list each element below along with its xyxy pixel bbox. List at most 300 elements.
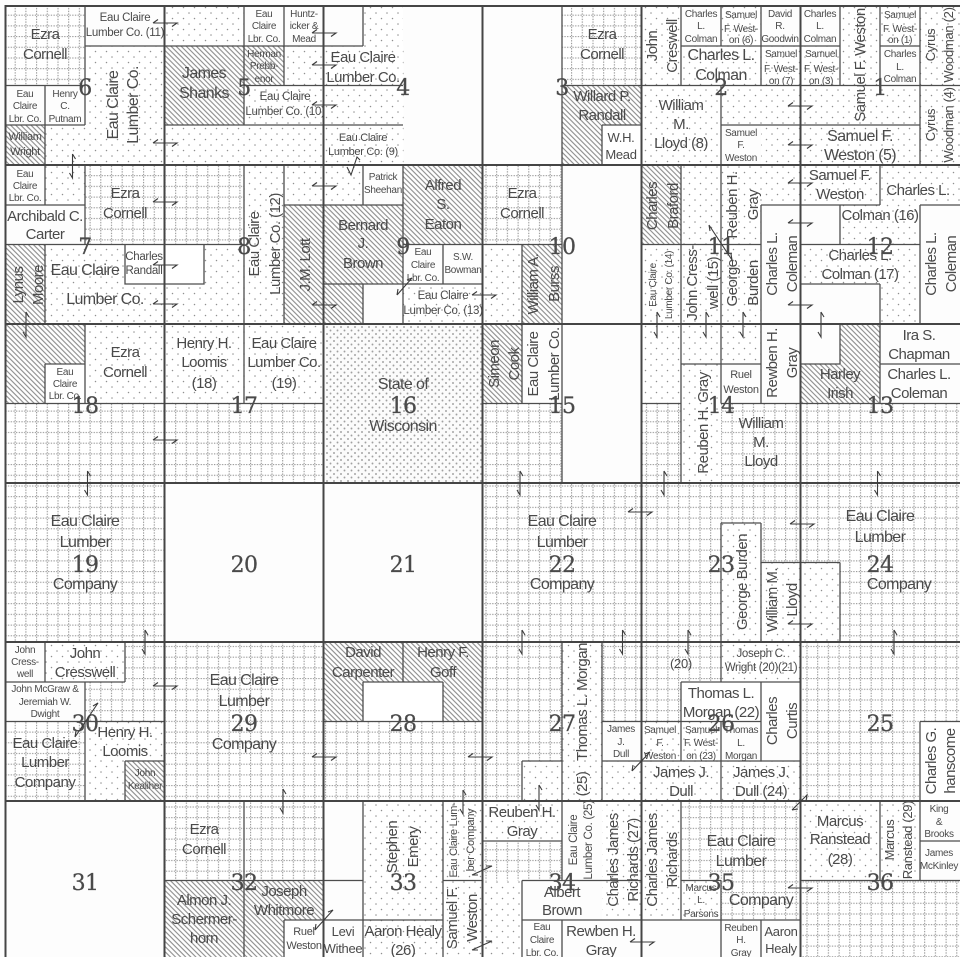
owner: W.H. Mead: W.H. [608, 130, 634, 145]
owner: King & Brooks: King [930, 804, 948, 815]
owner: William Wright: William [8, 131, 42, 143]
owner: Eau Claire Lumber Co. (9): Lumber Co. (9) [328, 146, 398, 158]
owner: Samuel F. Weston, section 2: F. [737, 140, 745, 151]
owner: Eau Claire Lumber Company, section 19: Company [53, 576, 118, 593]
section number 5: 5 [237, 76, 251, 101]
owner: James J. Dull, small parcel: Dull [613, 749, 629, 760]
owner: Ezra Cornell, section 32: Cornell [182, 841, 226, 858]
owner: Eau Claire Lumber Company, section 35: Company [729, 892, 794, 909]
owner: Eau Claire Lumber Co., section 6: Lumber Co. [125, 66, 142, 144]
owner: Eau Claire Lumber Company, section 35: Lumber [716, 853, 768, 870]
section number 19: 19 [72, 553, 98, 578]
owner: S.W. Bowman: Bowman [444, 265, 482, 276]
owner: Thomas L. Morgan (25): (25) [574, 771, 591, 796]
owner: Charles L. Colman, section 1: Colman [884, 74, 916, 85]
owner: Levi Withee: Withee [324, 941, 362, 956]
section number 11: 11 [708, 235, 734, 260]
owner: Eau Claire Lumber Company, section 29: Eau Claire [210, 672, 279, 689]
owner: Stephen Emery: Stephen [384, 821, 401, 873]
owner: Joseph Whitmore: Whitmore [254, 902, 314, 919]
owner: Charles James Richards: Charles James [644, 813, 661, 907]
owner: Samuel F. Weston (6): F. West- [724, 24, 758, 35]
owner: Samuel F. Weston (1): on (1) [888, 35, 912, 46]
owner: Almon J. Schermerhorn: horn [190, 930, 218, 947]
owner: Levi Withee: Levi [332, 924, 355, 939]
owner: Eau Claire Lbr. Co., section 6: Lbr. Co. [9, 114, 41, 125]
section number 9: 9 [396, 235, 410, 260]
owner: Samuel F. Weston, section 12: Weston [816, 186, 864, 203]
owner: Bernard J. Brown: Bernard [338, 217, 388, 234]
section number 25: 25 [867, 712, 893, 737]
owner: Eau Claire Lumber Co., section 15: Lumber Co. [546, 327, 563, 401]
section number 36: 36 [867, 871, 893, 896]
owner: Herman Prebbenor: Herman [247, 49, 281, 60]
section number 10: 10 [549, 235, 575, 260]
owner: State of Wisconsin: State of [378, 376, 429, 393]
section number 4: 4 [396, 76, 410, 101]
owner: Cyrus Woodman (4): Woodman (4) [941, 87, 956, 163]
owner: Eau Claire Lbr. Co., section 6: Claire [13, 101, 38, 112]
section number 29: 29 [231, 712, 257, 737]
owner: Samuel F. Weston (5): Samuel F. [827, 128, 893, 145]
owner: Eau Claire Lumber Co. (19): Eau Claire [251, 335, 317, 352]
owner: Henry H. Loomis, section 30: Loomis [102, 743, 148, 760]
owner: Eau Claire Lumber Company, section 24: Company [867, 576, 932, 593]
owner: Eau Claire Lumber Company, section 30: Lumber [21, 754, 69, 771]
owner: Thomas L. Morgan, small parcel: Thomas [724, 725, 758, 736]
owner: Ezra Cornell, section 7-8: Cornell [103, 205, 147, 222]
owner: Samuel F. Weston (23): Samuel [685, 725, 717, 736]
owner: William M. Lloyd (8): William [659, 97, 703, 114]
section number 8: 8 [237, 235, 251, 260]
owner: David Carpenter: David [345, 644, 381, 661]
owner: Reuben H. Gray, small parcel: Reuben [724, 923, 758, 934]
section number 20: 20 [231, 553, 257, 578]
owner: Eau Claire Lumber Company, section 24: Lumber [855, 529, 907, 546]
owner: Henry F. Goff: Henry F. [417, 644, 469, 661]
owner: Eau Claire Lbr. Co., section 9: Eau [415, 247, 431, 258]
owner: Charles Randall: Randall [126, 265, 162, 277]
owner: S.W. Bowman: S.W. [453, 252, 473, 263]
parcel note: (20): (20) [670, 656, 692, 671]
owner: Ruel Weston, section 14: Ruel [730, 369, 752, 381]
owner: Eau Claire Lbr. Co., section 5: Eau [256, 9, 272, 20]
owner: Ezra Cornell, section 18: Cornell [103, 364, 147, 381]
owner: Charles Curtis: Charles [764, 697, 781, 745]
owner: Eau Claire Lbr. Co., section 18: Lbr. Co. [49, 391, 81, 402]
owner: Henry H. Loomis (18): (18) [192, 375, 217, 392]
owner: Samuel F. Weston (1): Samuel [884, 10, 916, 21]
owner: Samuel F. Weston, section 33: Samuel F. [444, 887, 461, 949]
owner: Bernard J. Brown: J. [358, 235, 368, 252]
owner: Patrick Sheehan: Patrick [369, 172, 399, 183]
owner: Marcus Ranstead (29): Ranstead (29) [900, 801, 915, 879]
owner: Charles L. Coleman, section 12: Coleman [943, 236, 960, 292]
owner: Samuel F. Weston (3): Samuel [805, 49, 837, 60]
owner: Eau Claire Lumber Company, section 29: Company [212, 736, 277, 753]
owner: Eau Claire Lbr. Co., section 18: Eau [57, 367, 73, 378]
owner: Ezra Cornell, section 18: Ezra [111, 344, 141, 361]
section number 16: 16 [390, 394, 416, 419]
owner: Alfred S. Eaton: Alfred [425, 177, 461, 194]
owner: Eau Claire Lumber Company, section 22: Lumber [537, 534, 589, 551]
owner: Charles L. Colman (16): Colman (16) [841, 207, 919, 224]
owner: Thomas L. Morgan, small parcel: Morgan [725, 751, 757, 762]
owner: Alfred S. Eaton: S. [436, 196, 450, 213]
owner: Charles L. Colman (17): Colman (17) [821, 266, 899, 283]
owner: Henry H. Loomis (18): Henry H. [176, 335, 232, 352]
owner: Eau Claire Lumber Co. (25): Eau Claire [568, 815, 580, 865]
owner: John McGraw & Jeremiah W. Dwight: Dwight [31, 709, 60, 720]
owner: Patrick Sheehan: Sheehan [364, 185, 402, 196]
owner: John Creswell: John [644, 31, 661, 61]
owner: Joseph C. Wright (20)(21): Wright (20)(21) [725, 662, 798, 674]
owner: Eau Claire Lbr. Co., section 9: Claire [411, 260, 436, 271]
owner: King & Brooks: Brooks [924, 829, 954, 840]
owner: Ezra Cornell, section 6: Cornell [23, 46, 67, 63]
owner: James McKinley: McKinley [920, 861, 958, 872]
owner: David R. Goodwin: David [768, 9, 792, 20]
section number 21: 21 [390, 553, 416, 578]
owner: David Carpenter: Carpenter [332, 664, 395, 681]
owner: Samuel F. Weston (7): F. West- [764, 64, 798, 75]
owner: George Burden, section 23: George Burden [734, 534, 751, 630]
owner: Eau Claire Lumber Company, section 22: Eau Claire [528, 513, 597, 530]
owner: Samuel F. Weston, vertical: Samuel F. Weston [852, 8, 869, 122]
owner: Archibald C. Carter: Carter [26, 226, 65, 243]
owner: Marcus Ranstead (28): Ranstead [810, 831, 870, 848]
owner: Eau Claire Lumber Co. (11): Eau Claire [100, 12, 150, 24]
owner: Huntzicker & Mead: Huntz- [290, 9, 318, 20]
owner: Henry C. Putnam: C. [60, 101, 70, 112]
owner: John Cresswell, section 30: John [70, 645, 100, 662]
owner: Aaron Healy, section 35: Healy [765, 941, 798, 956]
section number 14: 14 [708, 394, 734, 419]
owner: Eau Claire Lbr. Co., section 5: Lbr. Co. [248, 34, 280, 45]
owner: Charles L. Colman (16): Charles L. [886, 182, 950, 199]
owner: Reuben H. Gray, section 11: Reuben H. [724, 171, 741, 239]
owner: Samuel F. Weston, section 2: Weston [725, 153, 757, 164]
section number 31: 31 [72, 871, 98, 896]
owner: Reuben H. Gray, small parcel: H. [736, 935, 746, 946]
owner: Joseph C. Wright (20)(21): Joseph C. [736, 648, 786, 660]
owner: Cyrus Woodman (2): Cyrus [923, 28, 938, 61]
owner: Ezra Cornell, section 7-8: Ezra [111, 185, 141, 202]
owner: James McKinley: James [925, 848, 953, 859]
section number 1: 1 [873, 76, 887, 101]
owner: Samuel F. Weston, section 12: Samuel F. [809, 167, 871, 184]
owner: James J. Dull, small parcel: J. [617, 737, 625, 748]
owner: Herman Prebbenor: Prebb- [250, 61, 278, 72]
owner: Ruel Weston, section 32: Ruel [293, 926, 315, 938]
owner: John Cresswell, small parcel: John [15, 645, 35, 656]
owner: Eau Claire Lumber Company, section 33: Eau Claire Lum- [448, 802, 460, 877]
owner: Lynus Moore: Lynus [10, 267, 27, 303]
owner: Eau Claire Lumber Company, section 29: Lumber [219, 693, 271, 710]
section number 3: 3 [555, 76, 569, 101]
owner: Henry H. Loomis, section 30: Henry H. [97, 724, 153, 741]
owner: Ezra Cornell, section 10: Cornell [500, 205, 544, 222]
owner: Ezra Cornell, section 3: Ezra [588, 26, 618, 43]
owner: Charles L. Colman, section 2: Colman [695, 67, 747, 84]
owner: Charles L. Coleman, section 11: Coleman [784, 236, 801, 292]
owner: Charles L. Coleman, section 11: Charles L. [764, 232, 781, 296]
owner: Eau Claire Lumber Co., section 4: Eau Claire [330, 49, 396, 66]
owner: Reuben H. Gray, section 34: Reuben H. [488, 804, 556, 821]
owner: Marcus L. Parsons: Parsons [684, 909, 719, 920]
section number 7: 7 [78, 235, 92, 260]
owner: Charles L. Colman, section 2 top: L. [697, 21, 705, 32]
owner: Eau Claire Lumber Company, section 35: Eau Claire [707, 833, 776, 850]
owner: Eau Claire Lumber Company, section 19: Lumber [60, 534, 112, 551]
owner: Thomas L. Morgan (22): Thomas L. [688, 685, 754, 702]
owner: Simeon Cook: Cook [506, 346, 523, 381]
owner: Charles Randall: Charles [125, 251, 163, 263]
owner: Samuel F. Weston, section 33: Weston [464, 894, 481, 942]
owner: Huntzicker & Mead: icker & [290, 21, 319, 32]
owner: Eau Claire Lumber Co. (19): Lumber Co. [247, 354, 321, 371]
owner: Ira S. Chapman: Ira S. [903, 327, 935, 344]
owner: Samuel F. Weston (6): on (6) [729, 35, 753, 46]
section number 12: 12 [867, 235, 893, 260]
owner: William M. Lloyd, section 23: Lloyd [784, 583, 801, 617]
owner: Eau Claire Lbr. Co., section 18: Claire [53, 379, 78, 390]
owner: Eau Claire Lumber Co. (12): Lumber Co. (12) [267, 193, 284, 295]
owner: James Shanks: Shanks [179, 85, 229, 102]
owner: Samuel F. Weston, section 26: Samuel [644, 725, 676, 736]
owner: Charles L. Coleman, section 12: Charles L. [923, 232, 940, 296]
owner: John Cresswell, section 30: Cresswell [55, 664, 115, 681]
owner: Charles G. Hanscome: hanscome [942, 728, 959, 794]
owner: John Cresswell (15): well (15) [705, 256, 722, 310]
owner: Eau Claire Lumber Co., section 7: Lumber Co. [66, 291, 144, 308]
owner: State of Wisconsin: Wisconsin [369, 418, 437, 435]
owner: Eau Claire Lumber Co. (9): Eau Claire [339, 132, 387, 144]
owner: Eau Claire Lumber Co. (14): Eau Claire [648, 262, 659, 307]
owner: Charles L. Colman, section 1 top: Colman [804, 34, 836, 45]
owner: Almon J. Schermerhorn: Almon J. [177, 892, 231, 909]
owner: John Cresswell (15): John Cress- [684, 245, 701, 321]
owner: Eau Claire Lumber Co. (14): Lumber Co. (14) [664, 251, 675, 319]
owner: John Creswell: Creswell [664, 19, 681, 73]
owner: Simeon Cook: Simeon [486, 340, 503, 388]
owner: William M. Lloyd, section 14: William [739, 415, 783, 432]
owner: Rewben H. Gray, section 14: Rewben H. [764, 328, 781, 398]
owner: Eau Claire Lbr. Co., section 9: Lbr. Co. [407, 273, 439, 284]
owner: Ira S. Chapman: Chapman [888, 346, 950, 363]
owner: Eau Claire Lbr. Co., section 5: Claire [252, 21, 277, 32]
owner: William Wright: Wright [10, 146, 40, 158]
owner: Harley Irish: Harley [820, 366, 861, 383]
owner: Samuel F. Weston (3): F. West- [804, 64, 838, 75]
owner: Samuel F. Weston, section 26: Weston [644, 751, 676, 762]
owner: Aaron Healy (26): Aaron Healy [364, 923, 443, 940]
owner: William M. Lloyd, section 14: Lloyd [744, 453, 778, 470]
owner: Marcus L. Parsons: L. [697, 895, 705, 906]
owner: Charles L. Colman, section 2 top: Colman [685, 34, 717, 45]
owner: Charles L. Colman, section 1 top: L. [816, 21, 824, 32]
owner: Eau Claire Lumber Co., section 7: Eau Claire [51, 262, 120, 279]
owner: Samuel F. Weston (3): on (3) [809, 76, 833, 87]
owner: David R. Goodwin: R. [775, 21, 785, 32]
owner: Charles L. Colman (17): Charles L. [828, 247, 892, 264]
owner: George Burden, section 11: Burden [745, 260, 762, 306]
owner: Charles Braford: Braford [665, 183, 682, 229]
owner: Thomas L. Morgan (22): Morgan (22) [683, 704, 760, 721]
owner: Rewben H. Gray, section 14: Gray [784, 347, 801, 378]
owner: Eau Claire Lumber Co., section 4: Lumber Co. [326, 69, 400, 86]
owner: Samuel F. Weston (23): on (23) [686, 751, 716, 762]
owner: Marcus Ranstead (28): (28) [828, 851, 853, 868]
owner: Willard P. Randall: Randall [578, 107, 626, 124]
owner: Samuel F. Weston (7): on (7) [769, 76, 793, 87]
owner: Ruel Weston, section 32: Weston [286, 940, 322, 952]
owner: Herman Prebbenor: enor [255, 74, 274, 85]
owner: Thomas L. Morgan (25): Thomas L. Morgan [574, 643, 591, 761]
owner: W.H. Mead: Mead [605, 147, 637, 162]
owner: Eau Claire Lumber Co., section 6: Eau Claire [105, 70, 122, 139]
owner: Eau Claire Lbr. Co., section 6: Eau [17, 89, 33, 100]
owner: Eau Claire Lumber Company, section 22: Company [530, 576, 595, 593]
owner: Lynus Moore: Moore [30, 265, 47, 305]
owner: Eau Claire Lumber Co., section 15: Eau Claire [525, 331, 542, 397]
section number 13: 13 [867, 394, 893, 419]
owner: Rewben H. Gray, section 34: Rewben H. [566, 923, 636, 940]
owner: Charles L. Colman, section 2: Charles L. [688, 47, 754, 64]
owner: Eau Claire Lbr. Co., section 7: Claire [13, 181, 38, 192]
owner: Cyrus Woodman (2): Woodman (2) [941, 7, 956, 83]
owner: Archibald C. Carter: Archibald C. [7, 208, 83, 225]
owner: John McGraw & Jeremiah W. Dwight: Jeremiah W. [19, 697, 71, 708]
owner: John McGraw & Jeremiah W. Dwight: John McGraw & [11, 684, 79, 695]
owner: Eau Claire Lumber Co. (10): Eau Claire [260, 91, 310, 103]
owner: Eau Claire Lumber Company, section 30: Eau Claire [12, 735, 78, 752]
owner: Reuben H. Gray, section 14: Reuben H. Gray [695, 371, 712, 474]
owner: John Kealiher: John [135, 768, 155, 779]
owner: Samuel F. Weston (6): Samuel [725, 10, 757, 21]
owner: Ezra Cornell, section 10: Ezra [508, 185, 538, 202]
owner: William M. Lloyd (8): Lloyd (8) [654, 135, 708, 152]
owner: J.M. Lott: J.M. Lott [297, 237, 314, 292]
owner: King & Brooks: & [936, 817, 943, 828]
owner: Eau Claire Lumber Co. (12): Eau Claire [246, 211, 263, 277]
section number 18: 18 [72, 394, 98, 419]
owner: James J. Dull, section 26: James J. [653, 764, 709, 781]
section number 27: 27 [549, 712, 575, 737]
section number 33: 33 [390, 871, 416, 896]
owner: Harley Irish: Irish [827, 385, 853, 402]
owner: Reuben H. Gray, section 34: Gray [507, 823, 538, 840]
owner: Charles James Richards: Richards [664, 832, 681, 888]
owner: Thomas L. Morgan, small parcel: L. [737, 738, 745, 749]
owner: Charles Curtis: Curtis [784, 703, 801, 739]
owner: Stephen Emery: Emery [405, 826, 422, 867]
owner: Eau Claire Lumber Company, section 24: Eau Claire [846, 508, 915, 525]
owner: Charles James Richards (27): Richards (27) [625, 818, 642, 902]
owner: Charles L. Colman, section 1 top: Charles [804, 9, 836, 20]
owner: James J. Dull, small parcel: James [607, 724, 635, 735]
owner: James Shanks: James [182, 65, 227, 82]
section number 30: 30 [72, 712, 98, 737]
owner: William M. Lloyd, section 23: William M. [764, 568, 781, 632]
owner: John Cresswell, small parcel: Cress- [11, 657, 39, 668]
owner: George Burden, section 11: George [724, 259, 741, 307]
owner: Eau Claire Lbr. Co., section 34: Eau [534, 922, 550, 933]
owner: Henry H. Loomis (18): Loomis [181, 354, 227, 371]
owner: Ezra Cornell, section 32: Ezra [190, 821, 220, 838]
owner: Henry C. Putnam: Henry [52, 89, 78, 100]
owner: Eau Claire Lbr. Co., section 7: Eau [17, 169, 33, 180]
section number 24: 24 [867, 553, 893, 578]
owner: William A. Burss: William A. [525, 254, 542, 314]
section number 6: 6 [78, 76, 92, 101]
owner: Samuel F. Weston, section 2: Samuel [725, 128, 757, 139]
owner: Charles G. Hanscome: Charles G. [923, 728, 940, 794]
owner: Henry C. Putnam: Putnam [49, 114, 81, 125]
owner: Samuel F. Weston (7): Samuel [765, 49, 797, 60]
owner: Eau Claire Lbr. Co., section 7: Lbr. Co. [9, 193, 41, 204]
owner: Samuel F. Weston (1): F. West- [883, 24, 917, 35]
owner: Eau Claire Lumber Co. (13): Lumber Co. (13) [403, 305, 483, 317]
owner: Aaron Healy, section 35: Aaron [764, 924, 798, 939]
owner: Eau Claire Lumber Co. (11): Lumber Co. (11) [86, 27, 165, 39]
owner: Reuben H. Gray, section 11: Gray [745, 189, 762, 220]
owner: Samuel F. Weston (5): Weston (5) [824, 147, 896, 164]
section number 34: 34 [549, 871, 575, 896]
owner: Ruel Weston, section 14: Weston [723, 384, 759, 396]
owner: Ezra Cornell, section 3: Cornell [580, 46, 624, 63]
section number 15: 15 [549, 394, 575, 419]
section number 26: 26 [708, 712, 734, 737]
owner: Samuel F. Weston (23): F. West- [684, 738, 718, 749]
owner: Eau Claire Lumber Co. (19): (19) [272, 375, 297, 392]
section number 22: 22 [549, 553, 575, 578]
owner: Bernard J. Brown: Brown [343, 255, 383, 272]
owner: James J. Dull (24): Dull (24) [735, 783, 788, 800]
owner: Cyrus Woodman (4): Cyrus [923, 108, 938, 141]
owner: James J. Dull (24): James J. [733, 764, 789, 781]
owner: William M. Lloyd (8): M. [673, 116, 689, 133]
owner: Charles L. Coleman, section 13: Charles L. [887, 366, 951, 383]
owner: Charles L. Colman, section 2 top: Charles [685, 9, 717, 20]
owner: Henry F. Goff: Goff [430, 664, 457, 681]
owner: Eau Claire Lumber Company, section 33: ber Company [465, 808, 477, 871]
section number 23: 23 [708, 553, 734, 578]
owner: Ezra Cornell, section 6: Ezra [31, 26, 61, 43]
owner: Willard P. Randall: Willard P. [573, 88, 631, 105]
owner: James J. Dull, section 26: Dull [669, 783, 693, 800]
owner: William M. Lloyd, section 14: M. [753, 434, 769, 451]
owner: Samuel F. Weston, section 26: F. [656, 738, 664, 749]
section number 17: 17 [231, 394, 257, 419]
owner: Joseph Whitmore: Joseph [261, 883, 307, 900]
owner: John Kealiher: Kealiher [128, 781, 163, 792]
owner: Charles L. Coleman, section 13: Coleman [891, 385, 947, 402]
owner: John Cresswell, small parcel: well [16, 669, 33, 680]
owner: Alfred S. Eaton: Eaton [425, 216, 462, 233]
owner: William A. Burss: Burss [546, 266, 563, 302]
owner: David R. Goodwin: Goodwin [761, 34, 799, 45]
owner: Charles L. Colman, section 1: Charles [884, 49, 916, 60]
owner: Charles James Richards (27): Charles James [605, 813, 622, 907]
owner: Albert Brown: Brown [542, 902, 582, 919]
owner: Eau Claire Lumber Co. (13): Eau Claire [418, 290, 468, 302]
owner: Almon J. Schermerhorn: Schermer- [171, 911, 237, 928]
owner: Marcus Ranstead (29): Marcus [882, 819, 897, 860]
owner: Marcus Ranstead (28): Marcus [817, 813, 863, 830]
owner: Huntzicker & Mead: Mead [292, 34, 316, 45]
owner: Eau Claire Lumber Company, section 19: Eau Claire [51, 513, 120, 530]
